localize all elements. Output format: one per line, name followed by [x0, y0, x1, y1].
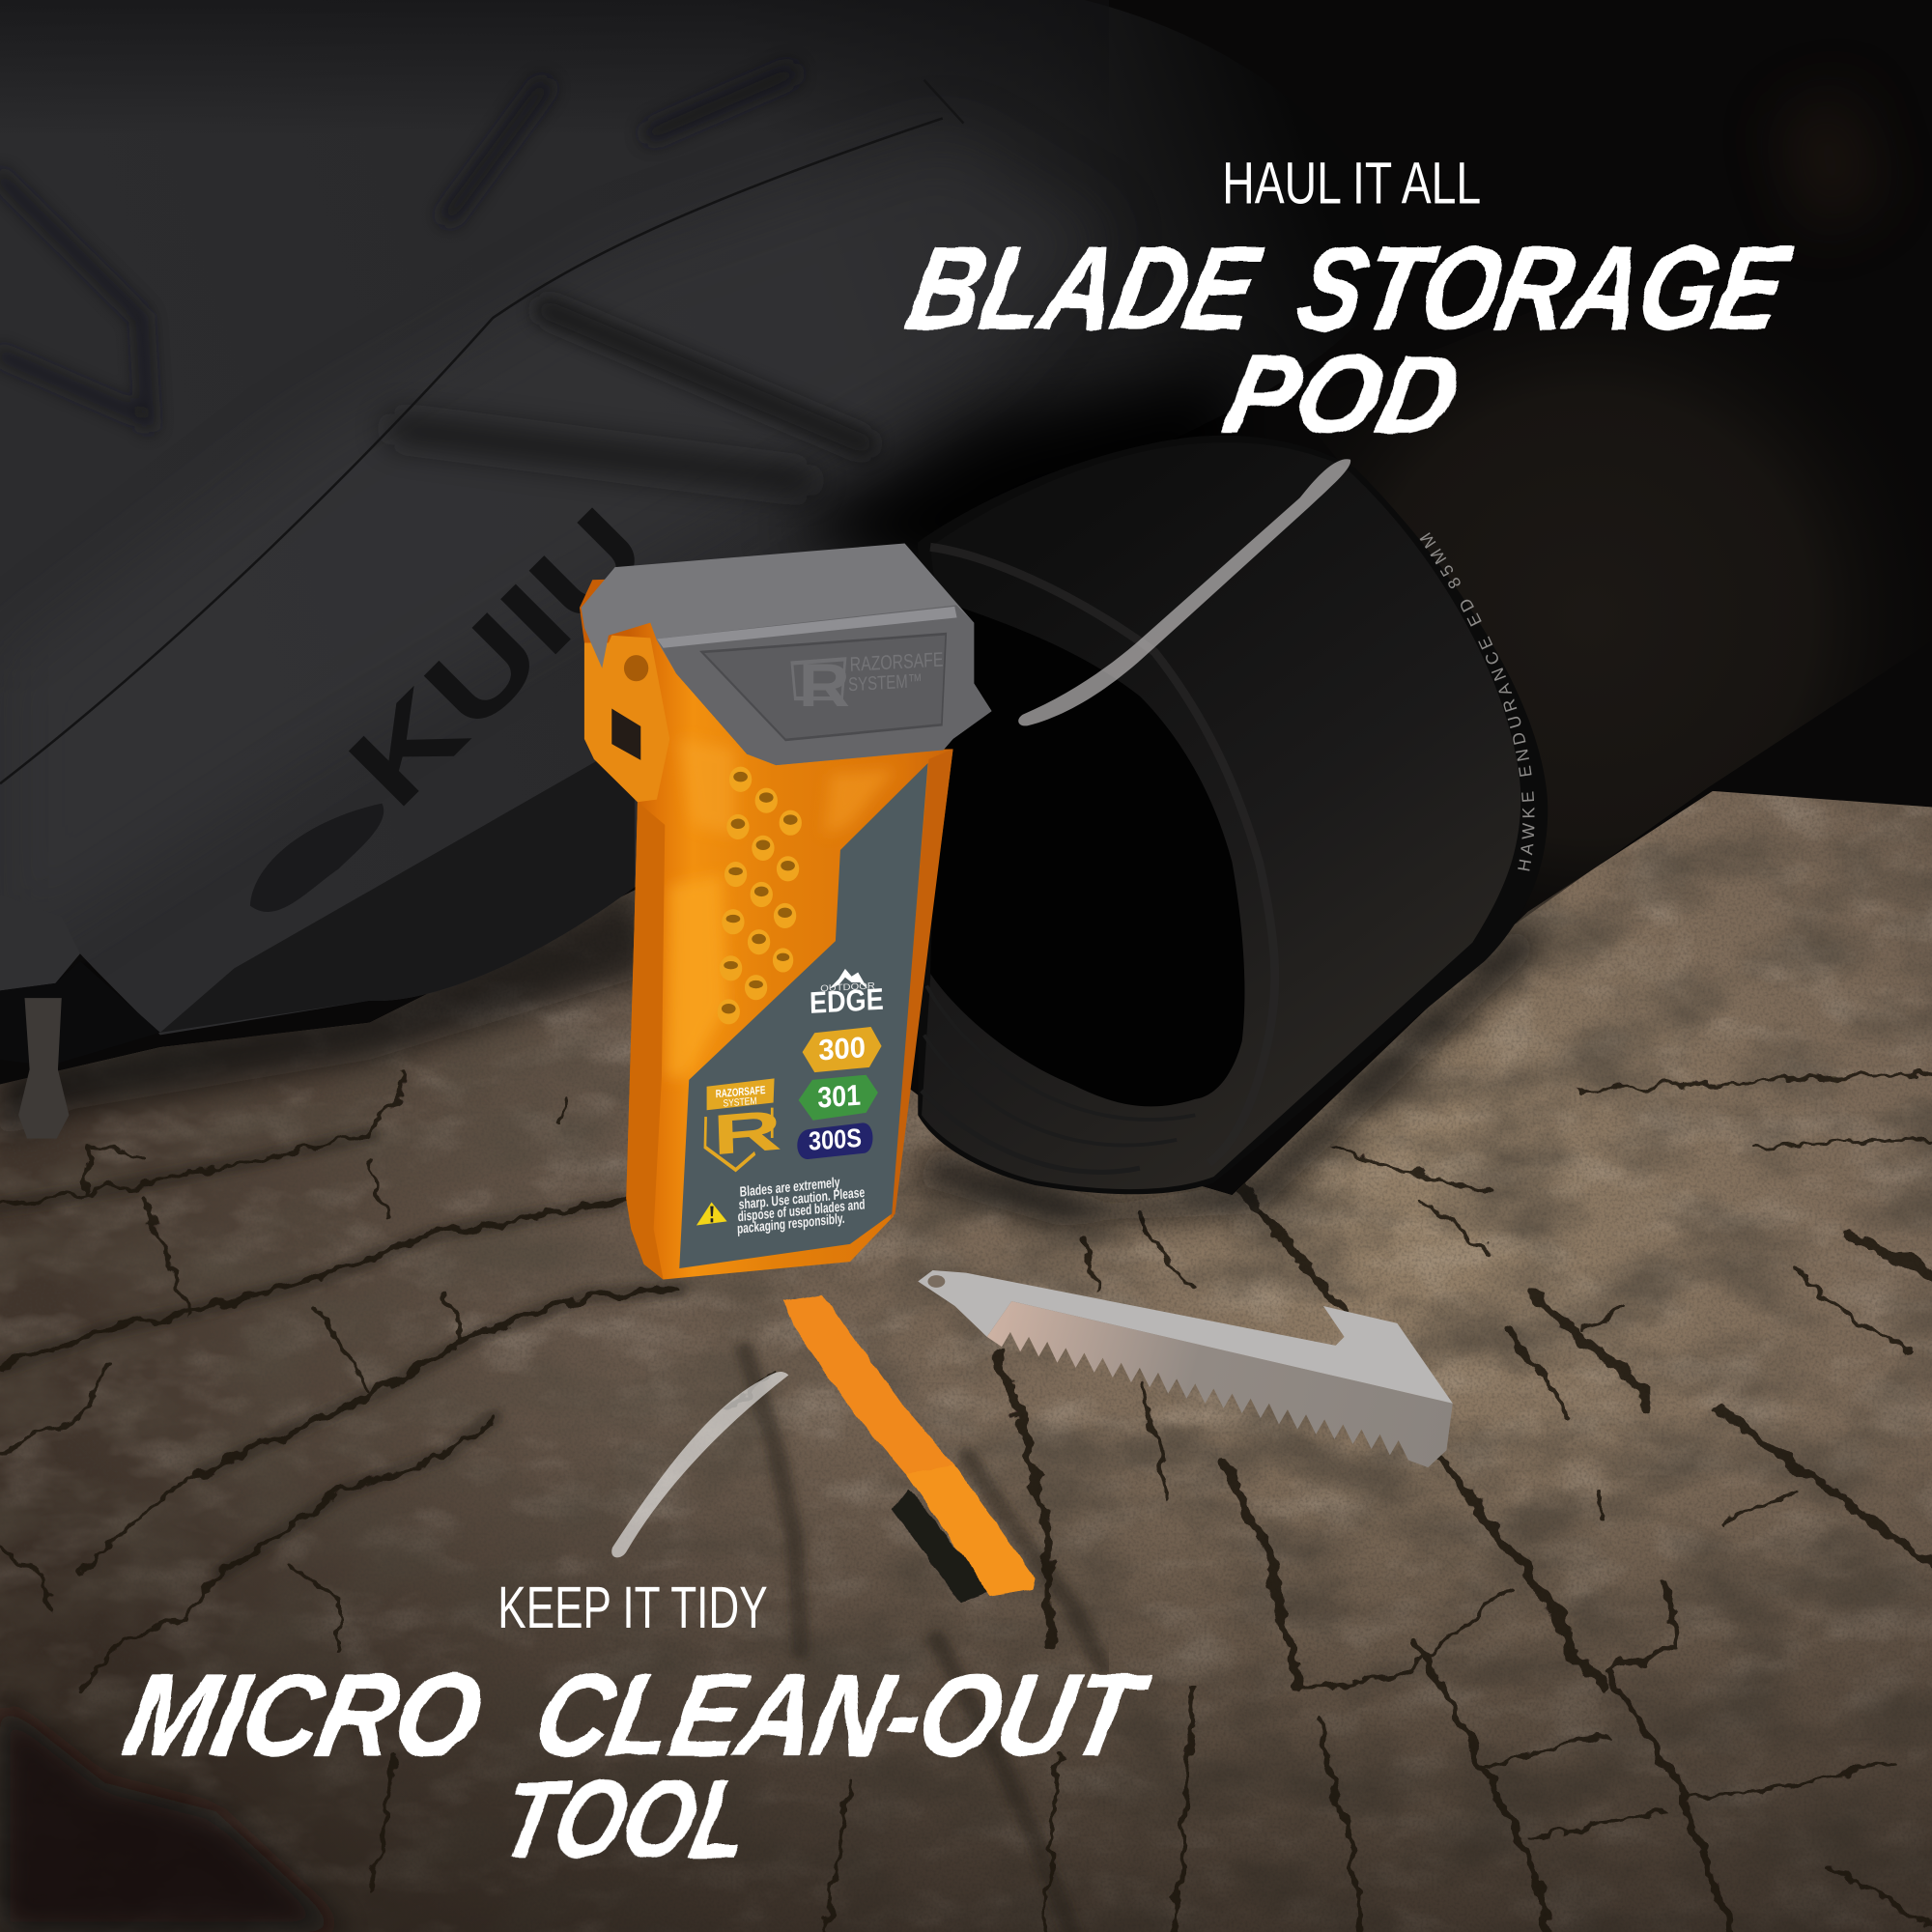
cap recessed panel [702, 634, 946, 740]
heading: blade storage pod: BLADE [897, 223, 1271, 355]
jacket folds [0, 74, 863, 480]
label: keep it tidy: KEEP IT TIDY [497, 1575, 768, 1640]
spotting scope hood [918, 436, 1548, 1194]
razorsafe badge: SYSTEM [723, 1094, 757, 1109]
cap logo embossed [792, 647, 944, 720]
heading: micro clean-out tool: CLEAN-OUT [525, 1650, 1157, 1779]
outdoor edge logo: OUTDOOR [820, 980, 875, 994]
cap logo embossed: SYSTEM™ [848, 669, 923, 696]
heading: micro clean-out tool: TOOL [492, 1759, 761, 1881]
blade upper strip [918, 1270, 1453, 1404]
tool bristles [892, 1489, 992, 1603]
warning triangle [696, 1202, 727, 1226]
shadow under scope [912, 924, 1540, 1226]
heading: micro clean-out tool: MICRO [114, 1650, 493, 1779]
wood cracks, left half [0, 1073, 850, 1932]
zipper cuff [0, 895, 160, 1139]
razorsafe badge: RAZORSAFE [716, 1084, 766, 1101]
jacket bear logo [250, 804, 384, 912]
warning text: dispose of used blades and [737, 1196, 866, 1225]
jacket [0, 0, 1392, 1139]
spotting scope tube [1293, 283, 1932, 924]
log end at top right [1775, 86, 1886, 234]
heading: blade storage pod [897, 223, 1800, 456]
outdoor edge logo: EDGE [810, 981, 884, 1020]
warning text [737, 1174, 866, 1236]
razorsafe badge [705, 1078, 782, 1170]
dark wedge in lower left corner [0, 1700, 345, 1932]
warning text: sharp. Use caution. Please [738, 1184, 866, 1212]
ring engraving: HAWKE ENDURANCE ED 85MM [1420, 532, 1534, 871]
saw blade [918, 1270, 1453, 1467]
callout stroke: storage pod [1018, 459, 1350, 725]
wood cracks, right half [997, 1073, 1932, 1932]
attachment lobe [584, 636, 669, 802]
label: haul it all: HAUL IT ALL [1222, 150, 1481, 215]
warning text: packaging responsibly. [737, 1210, 845, 1236]
hood rim [930, 547, 1275, 1163]
badge 300S [797, 1122, 872, 1159]
micro clean-out tool [783, 1293, 1035, 1603]
pod orange body [580, 578, 953, 1279]
outdoor edge logo [810, 969, 884, 1020]
callout stroke: clean-out tool [611, 1372, 788, 1557]
heading: blade storage pod: POD [1215, 332, 1470, 456]
badge 301: 301 [817, 1079, 861, 1115]
heading: blade storage pod: STORAGE [1286, 223, 1800, 355]
razorsafe badge: R [712, 1099, 782, 1167]
cap logo embossed: R [799, 652, 850, 720]
grey label [679, 763, 928, 1268]
heading: micro clean-out tool [114, 1650, 1157, 1881]
body highlights [667, 875, 727, 1077]
storage pod product [580, 544, 992, 1279]
badge 301 [799, 1075, 878, 1121]
shadow under jacket [0, 881, 653, 1140]
lower fabric [160, 739, 635, 1033]
warning text: Blades are extremely [739, 1174, 840, 1200]
wood stump surface [0, 764, 1932, 1932]
hood opening [930, 601, 1244, 1106]
badge 300 [803, 1027, 882, 1072]
dimples [718, 767, 802, 1024]
cap logo embossed: RAZORSAFE [849, 647, 944, 676]
tool handle [783, 1293, 1035, 1597]
grey cap [582, 544, 992, 765]
badge 300S: 300S [809, 1122, 862, 1156]
KUIU brand print: KUIU [325, 484, 670, 831]
jacket seam [0, 118, 943, 783]
jacket light and shade [0, 135, 1109, 961]
badge 300: 300 [818, 1032, 866, 1067]
soft shading around cracks [0, 1135, 1220, 1932]
inner lens rings [922, 985, 1195, 1172]
